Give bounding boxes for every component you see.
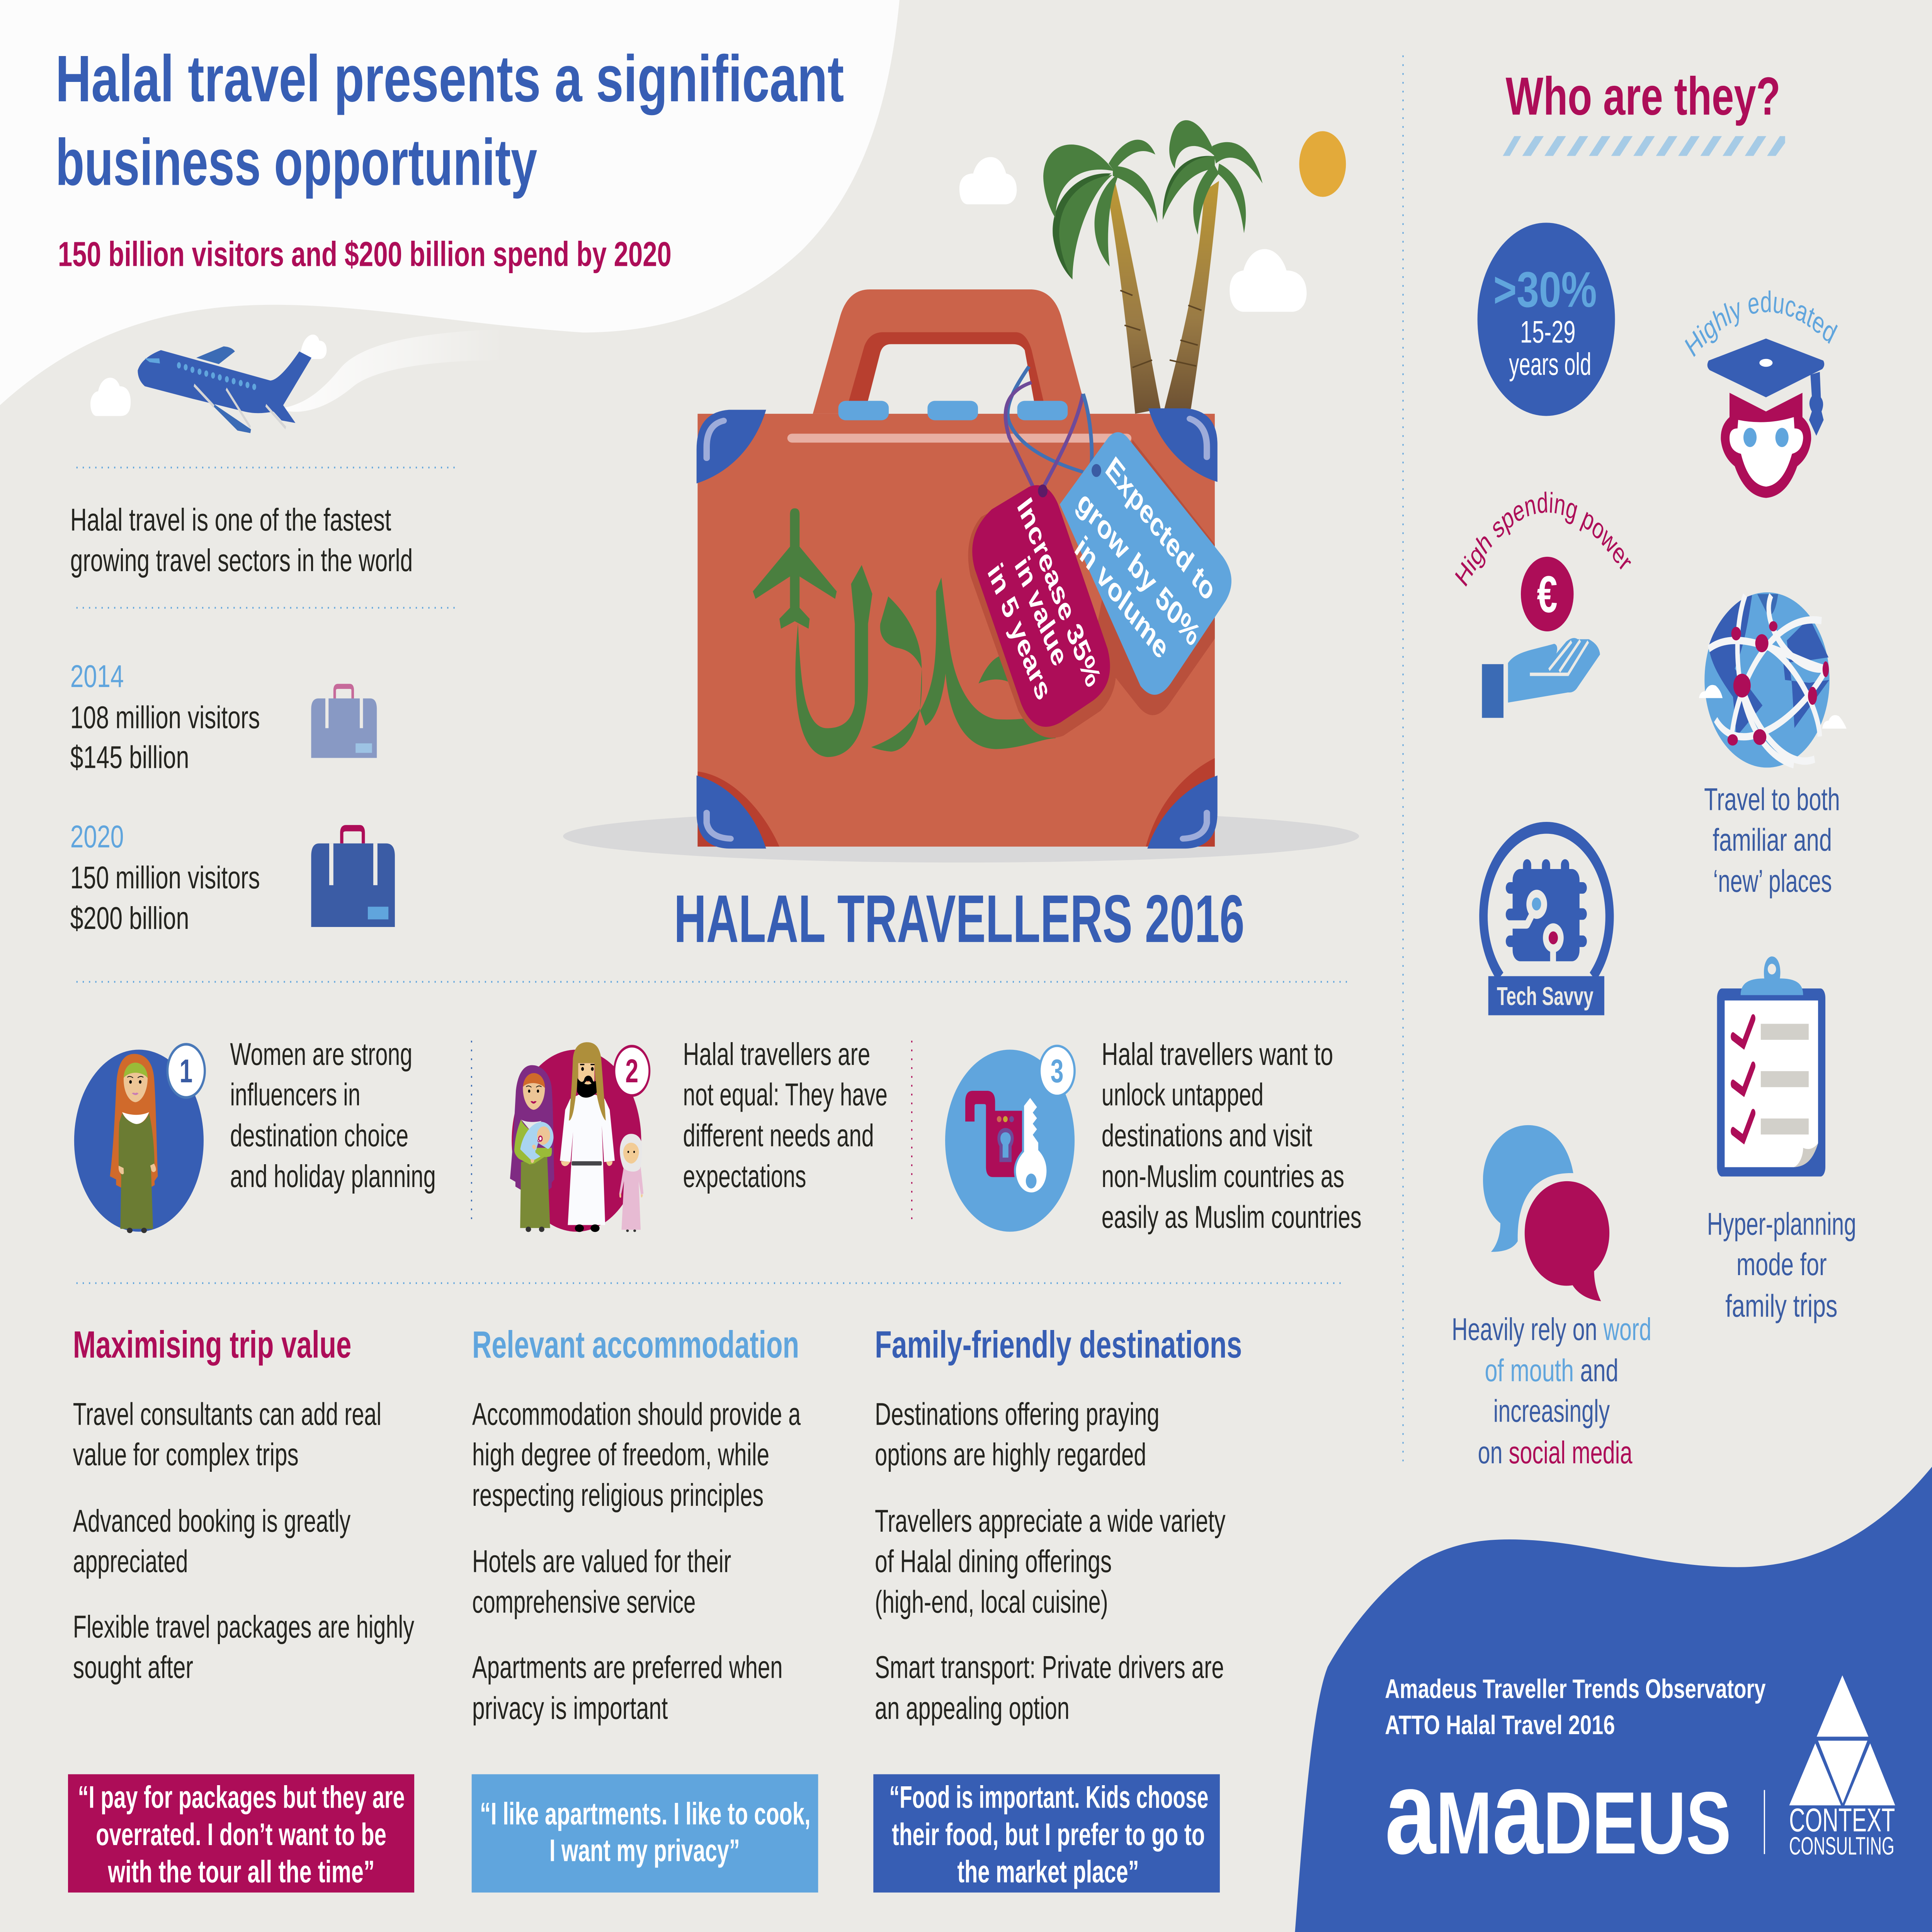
logo: context consulting: CONSULTING: [1789, 1832, 1895, 1860]
text block 3: easily as Muslim countries: [1102, 1200, 1362, 1235]
quote box: [68, 1774, 414, 1893]
body text: high degree of freedom, while: [472, 1437, 769, 1472]
body text: an appealing option: [875, 1691, 1070, 1726]
text block 3: Halal travellers want to: [1102, 1037, 1333, 1072]
quote box: I want my privacy”: [549, 1833, 740, 1868]
label: travel: [1704, 782, 1840, 899]
tag hole: magenta: [1038, 485, 1048, 497]
panel: who are they: [1451, 66, 1856, 1470]
body text: Advanced booking is greatly: [73, 1503, 351, 1539]
panel: maximising trip value: [68, 1324, 414, 1893]
body text: options are highly regarded: [875, 1437, 1146, 1472]
curved label: high spending power: High spending power: [1451, 486, 1637, 592]
quote box: [873, 1774, 1220, 1893]
blue footer blob: [1295, 1467, 1932, 1932]
label: word of mouth: of mouth and: [1485, 1353, 1618, 1388]
panel: relevant accommodation: [472, 1324, 818, 1893]
title: Halal travel presents a significant: [55, 42, 844, 116]
badge number 1: 1: [180, 1053, 192, 1089]
body text: Hotels are valued for their: [472, 1544, 731, 1579]
quote box: overrated. I don’t want to be: [96, 1817, 386, 1852]
tag text: value increase: in 5 years: [983, 558, 1056, 706]
main heading: HALAL TRAVELLERS 2016: [674, 881, 1245, 957]
source text: ATTO Halal Travel 2016: [1385, 1709, 1615, 1740]
icon: speech bubbles: [1483, 1125, 1609, 1301]
label: hyper-planning: family trips: [1725, 1289, 1837, 1324]
icon: cloud right: [1230, 249, 1307, 312]
icon: cloud left: [959, 157, 1017, 204]
tag text: value increase: Increase 35%: [1012, 492, 1106, 693]
tag text: value increase: in value: [1010, 551, 1072, 672]
body text: privacy is important: [472, 1691, 668, 1726]
tag text: expected growth: Expected to: [1100, 450, 1221, 608]
label: word of mouth: Heavily rely on word: [1452, 1312, 1651, 1347]
logo: context consulting: CONTEXT: [1789, 1801, 1895, 1838]
panel: family-friendly destinations: [873, 1324, 1242, 1893]
icon: small suitcase 2014: [311, 686, 377, 758]
text block 1: destination choice: [230, 1118, 408, 1153]
label: travel: Travel to both: [1704, 782, 1840, 817]
quote box: [472, 1774, 818, 1893]
quote box: “I pay for packages but they are: [78, 1780, 405, 1815]
text block 3: [1102, 1037, 1362, 1235]
body text: of Halal dining offerings: [875, 1544, 1112, 1579]
quote box: “Food is important. Kids choose: [889, 1780, 1209, 1815]
body text: Apartments are preferred when: [472, 1650, 783, 1685]
icon: coin and hand: [1482, 557, 1600, 718]
label: hyper-planning: mode for: [1736, 1247, 1827, 1282]
intro text: [70, 503, 413, 578]
quote box: their food, but I prefer to go to: [892, 1817, 1205, 1852]
intro text: Halal travel is one of the fastest: [70, 503, 391, 538]
icon: airplane: [90, 335, 327, 433]
panel: insight 2 family: [510, 1037, 888, 1232]
icon: family on magenta circle: [510, 1042, 650, 1232]
text block 2: expectations: [683, 1159, 806, 1194]
curved label: highly educated: Highly educated: [1680, 285, 1841, 364]
stats 2014: 2014: [70, 659, 124, 694]
stats 2020: [70, 819, 260, 936]
body text: comprehensive service: [472, 1585, 696, 1620]
stats 2020: 150 million visitors: [70, 860, 260, 895]
stat circle: over 30 percent: >30%: [1493, 262, 1597, 318]
icon: woman on blue circle: [74, 1044, 205, 1233]
text block 1: influencers in: [230, 1077, 361, 1112]
white header blob: [0, 0, 900, 405]
text block 2: not equal: They have: [683, 1077, 888, 1112]
ground shadow: [563, 810, 1359, 862]
quote box: with the tour all the time”: [108, 1854, 375, 1889]
text block 2: [683, 1037, 888, 1194]
body text: [472, 1397, 801, 1726]
body text: sought after: [73, 1650, 193, 1685]
stat circle: over 30 percent: [1478, 223, 1615, 416]
body text: Destinations offering praying: [875, 1397, 1160, 1432]
body text: [73, 1397, 414, 1685]
tag shadows: [968, 440, 1215, 738]
source text: Amadeus Traveller Trends Observatory: [1385, 1673, 1766, 1704]
body text: Flexible travel packages are highly: [73, 1610, 414, 1645]
text block 1: and holiday planning: [230, 1159, 436, 1194]
icon: tech savvy chip: [1483, 828, 1610, 1015]
quote box: “I like apartments. I like to cook,: [480, 1796, 811, 1831]
logo: context consulting: [1789, 1675, 1895, 1860]
badge number 2: 2: [625, 1053, 638, 1089]
stats 2020: 2020: [70, 819, 124, 854]
stats 2014: $145 billion: [70, 740, 189, 775]
heading: Family-friendly destinations: [875, 1324, 1242, 1366]
logo: amadeus: aMaDEUS: [1385, 1745, 1731, 1879]
icon: globe: [1699, 592, 1847, 768]
plane trail: [279, 329, 504, 412]
tag text: expected growth: [1070, 450, 1221, 666]
heading: Relevant accommodation: [472, 1324, 799, 1366]
tag text: value increase: [983, 492, 1106, 706]
body text: [875, 1397, 1226, 1726]
text block 3: unlock untapped: [1102, 1077, 1264, 1112]
body text: Travel consultants can add real: [73, 1397, 381, 1432]
text block 3: non-Muslim countries as: [1102, 1159, 1344, 1194]
icon: sun: [1299, 131, 1346, 197]
body text: appreciated: [73, 1544, 188, 1579]
stat circle: over 30 percent: years old: [1509, 347, 1591, 381]
icon: palm trees: [1043, 120, 1263, 414]
panel: insight 3 destinations: [945, 1037, 1362, 1235]
badge number 3: 3: [1051, 1053, 1063, 1089]
label: word of mouth: [1452, 1312, 1651, 1470]
separator: [1764, 1790, 1765, 1854]
arabic word halal with plane: [753, 508, 1061, 757]
body text: (high-end, local cuisine): [875, 1585, 1108, 1620]
body text: Smart transport: Private drivers are: [875, 1650, 1224, 1685]
euro symbol: €: [1537, 565, 1558, 623]
icon: padlock and key on blue circle: [945, 1046, 1075, 1232]
stats 2020: $200 billion: [70, 901, 189, 936]
subtitle: 150 billion visitors and $200 billion spend by 2020: [58, 235, 672, 274]
text block 2: Halal travellers are: [683, 1037, 870, 1072]
icon: suitcase: [697, 289, 1218, 849]
panel: insight 1 women: [74, 1037, 436, 1233]
body text: respecting religious principles: [472, 1478, 764, 1513]
label: word of mouth: increasingly: [1493, 1394, 1610, 1429]
heading: Maximising trip value: [73, 1324, 351, 1366]
stat circle: over 30 percent: 15-29: [1520, 315, 1575, 349]
source text: [1385, 1673, 1766, 1740]
quote box: the market place”: [957, 1854, 1139, 1889]
panel: footer: [1385, 1673, 1895, 1879]
title: [55, 42, 844, 199]
body text: Travellers appreciate a wide variety: [875, 1503, 1226, 1539]
illustration: palm trees, sun, clouds, suitcase: [697, 120, 1346, 849]
tag: magenta: [972, 485, 1110, 727]
icon: large suitcase 2020: [311, 828, 395, 927]
text block 2: different needs and: [683, 1118, 874, 1153]
text block 1: Women are strong: [230, 1037, 412, 1072]
label: word of mouth: on social media: [1478, 1435, 1633, 1470]
tag hole: blue: [1092, 464, 1101, 477]
tag text: expected growth: in volume: [1070, 529, 1174, 666]
label: hyper-planning: [1707, 1207, 1856, 1324]
text block 1: [230, 1037, 436, 1194]
stats 2014: [70, 659, 260, 775]
heading: Who are they?: [1506, 66, 1781, 126]
tag: blue: [1060, 432, 1231, 695]
label: tech savvy: Tech Savvy: [1497, 982, 1594, 1011]
label: hyper-planning: Hyper-planning: [1707, 1207, 1856, 1242]
label: travel: ‘new’ places: [1713, 864, 1832, 899]
title: business opportunity: [55, 126, 537, 199]
label: travel: familiar and: [1713, 823, 1832, 858]
body text: value for complex trips: [73, 1437, 299, 1472]
stats 2014: 108 million visitors: [70, 700, 260, 735]
stripes underline: [1503, 136, 1785, 156]
body text: Accommodation should provide a: [472, 1397, 801, 1432]
tag text: expected growth: grow by 50%: [1072, 484, 1205, 653]
intro text: growing travel sectors in the world: [70, 543, 413, 578]
icon: graduate: [1708, 338, 1824, 498]
luggage tag strings: [1005, 367, 1092, 490]
icon: clipboard: [1717, 956, 1825, 1177]
text block 3: destinations and visit: [1102, 1118, 1312, 1153]
